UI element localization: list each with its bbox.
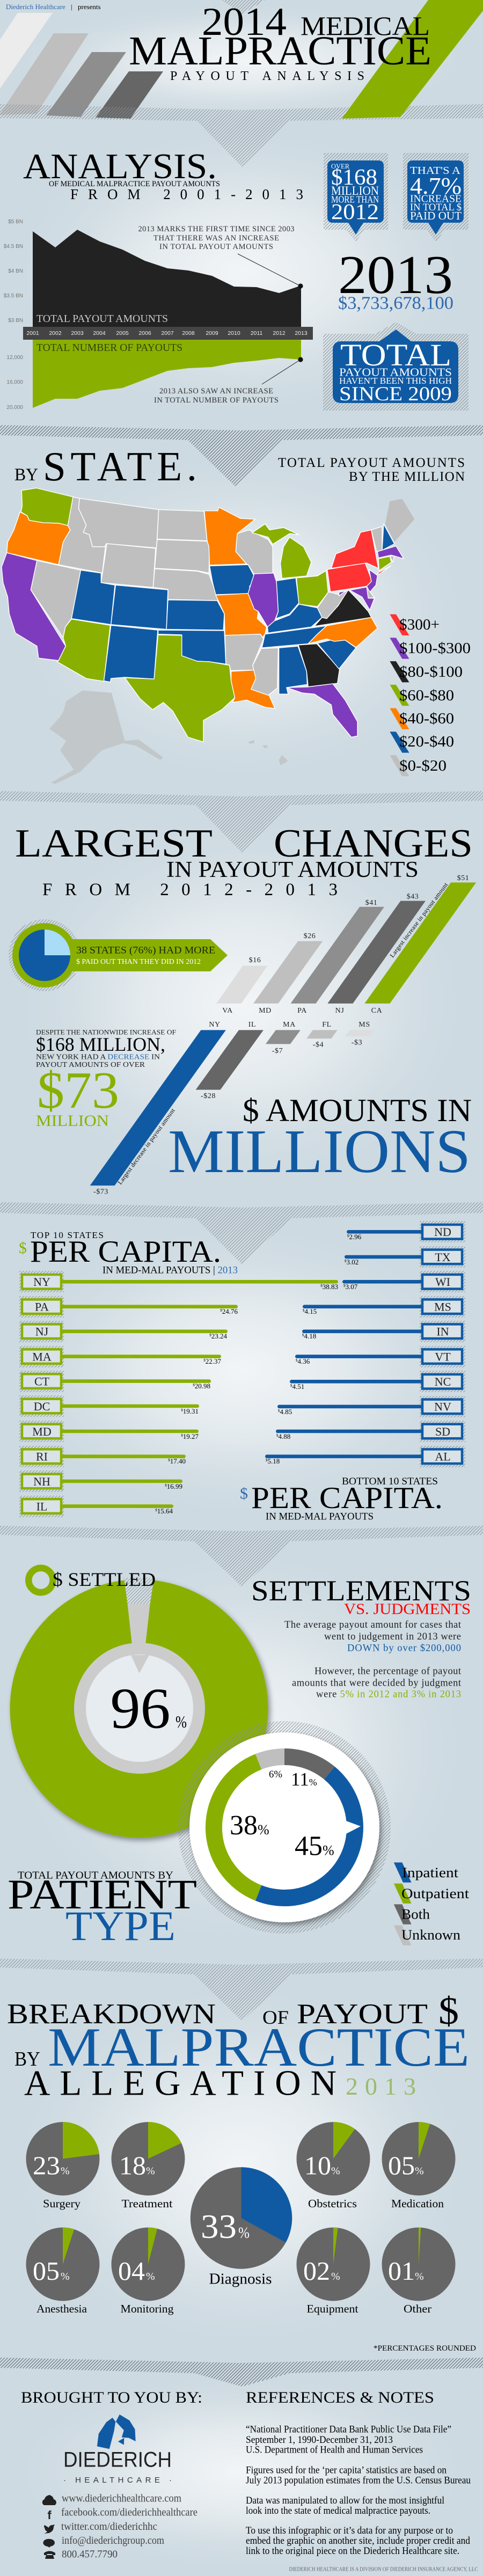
pie: monitoring: % xyxy=(146,2271,155,2282)
annotation: payout increase: 2013 MARKS THE FIRST TIME SINCE 2003 xyxy=(138,225,294,233)
callout: total since 2009: HAVEN'T BEEN THIS HIGH xyxy=(339,376,452,386)
chart: top 10 states per capita: NY xyxy=(33,1275,50,1289)
chart: top 10 states per capita: $ xyxy=(193,1383,195,1387)
chart: bottom 10 states per capita: 4.36 xyxy=(297,1357,310,1365)
chart: bottom 10 states per capita: NV xyxy=(434,1400,451,1414)
heading: amounts in millions: MILLIONS xyxy=(168,1117,471,1186)
pie: medication: Medication xyxy=(391,2197,444,2210)
heading: by state: BY xyxy=(14,465,38,485)
heading: breakdown by allegation: OF xyxy=(262,2007,289,2028)
chart: bottom 10 states per capita: 4.15 xyxy=(305,1307,317,1315)
donut chart: settled 96%: 96 xyxy=(111,1677,171,1741)
annotation: payout count increase: IN TOTAL NUMBER OF PAYOUTS xyxy=(154,396,279,405)
heading: top 10 per capita: IN MED-MAL PAYOUTS | 2013 xyxy=(103,1264,238,1276)
heading: analysis: FROM 2001-2013 xyxy=(70,186,303,202)
callout: 38 states pie: 38 STATES (76%) HAD MORE xyxy=(76,945,215,956)
chart: bottom 10 states per capita: 4.85 xyxy=(280,1408,292,1416)
heading: breakdown by allegation: PAYOUT xyxy=(297,1999,428,2030)
donut chart: settled 96% xyxy=(10,1578,268,1838)
subheading: by the million: TOTAL PAYOUT AMOUNTS xyxy=(278,456,465,470)
legend: settled xyxy=(28,1568,156,1592)
donut chart: patient type: 6% xyxy=(269,1769,282,1780)
text block: references: To use this infographic or it’s data for any purpose or to xyxy=(246,2525,453,2536)
donut chart: patient type: 45% xyxy=(295,1831,334,1861)
bar chart: largest increases: $51 xyxy=(457,874,469,882)
text block: judgment details xyxy=(284,1620,462,1700)
legend: patient type: Outpatient xyxy=(401,1886,470,1901)
chart: total payout amounts area chart xyxy=(4,219,313,411)
chart: total payout amounts area chart: 2002 xyxy=(49,330,62,336)
chart: total payout amounts area chart: 2001 xyxy=(26,330,39,336)
annotation: payout increase: THAT THERE WAS AN INCREASE xyxy=(153,234,279,243)
heading: largest changes xyxy=(15,822,473,899)
callout: 4.7% increase: PAID OUT xyxy=(410,209,462,222)
text block: references: link to the original piece on the Diederich Healthcare site. xyxy=(246,2545,459,2557)
heading: breakdown by allegation: ALLEGATION xyxy=(24,2063,336,2103)
heading: top 10 per capita xyxy=(19,1230,238,1276)
pie: medication: 05 xyxy=(388,2151,415,2180)
bar chart: largest decreases: NY xyxy=(209,1021,221,1029)
icon: telephone xyxy=(44,2551,55,2559)
chart: total payout amounts area chart: 2009 xyxy=(206,330,218,336)
text block: New York decrease: MILLION xyxy=(36,1112,109,1130)
chart: total payout amounts area chart: $4.5 BN xyxy=(4,244,23,250)
green header ribbon xyxy=(342,0,483,119)
chart: top 10 states per capita: 19.31 xyxy=(183,1407,199,1415)
bar chart: largest decreases xyxy=(90,1021,375,1196)
chart: top 10 states per capita: 38.83 xyxy=(323,1283,338,1291)
callout: $168 million: MILLION xyxy=(331,184,379,197)
heading: breakdown by allegation: $ xyxy=(438,1989,459,2032)
map legend: $0-$20 xyxy=(399,758,447,774)
chart: bottom 10 states per capita: $ xyxy=(303,1308,305,1313)
pie: treatment: Treatment xyxy=(121,2197,173,2210)
bar chart: largest decreases: MA xyxy=(283,1021,296,1029)
bar chart: largest decreases: -$73 xyxy=(93,1188,108,1196)
heading: bottom 10 per capita: PER CAPITA. xyxy=(251,1481,443,1515)
map legend xyxy=(390,614,471,776)
logo: Diederich Healthcare: · HEALTHCARE · xyxy=(63,2476,172,2485)
callout: $168 million: OVER xyxy=(331,163,350,170)
pie: diagnosis: % xyxy=(238,2224,250,2242)
map legend: $60-$80 xyxy=(399,687,454,704)
heading: patient type: TYPE xyxy=(65,1902,175,1949)
heading: analysis xyxy=(23,147,303,202)
chart: bottom 10 states per capita: $ xyxy=(276,1433,279,1438)
pie: monitoring: 04 xyxy=(118,2256,145,2286)
chart: total payout amounts area chart: 2013 xyxy=(295,330,308,336)
pie: other: 01 xyxy=(388,2256,415,2286)
chart: total payout amounts area chart: 20,000 xyxy=(6,405,23,411)
chart: bottom 10 states per capita: $ xyxy=(302,1333,304,1337)
stat: 2013 total: $3,733,678,100 xyxy=(338,293,453,313)
heading: breakdown by allegation xyxy=(7,1989,470,2103)
bar chart: largest decreases: Largest decrease in payout amount xyxy=(117,1107,177,1186)
pie: anesthesia: 05 xyxy=(33,2256,60,2286)
bar chart: largest decreases: -$3 xyxy=(352,1039,362,1046)
chart: top 10 states per capita: $ xyxy=(181,1433,183,1438)
bar chart: largest increases xyxy=(216,874,476,1015)
heading: analysis: ANALYSIS. xyxy=(23,147,217,186)
chart: top 10 states per capita: NH xyxy=(33,1475,50,1488)
heading: brought to you by: BROUGHT TO YOU BY: xyxy=(21,2389,202,2406)
annotation: payout count increase xyxy=(154,357,303,405)
chart: total payout amounts area chart: $3.5 BN xyxy=(4,293,23,299)
callout: total since 2009 xyxy=(323,322,469,411)
pie: anesthesia: Anesthesia xyxy=(36,2302,87,2315)
legend: patient type: Unknown xyxy=(401,1927,460,1943)
chart: top 10 states per capita: MA xyxy=(32,1350,52,1363)
text block: references: look into the state of medical malpractice payouts. xyxy=(246,2505,430,2516)
legend: patient type: Both xyxy=(401,1907,430,1922)
donut chart: settled 96%: % xyxy=(175,1712,187,1731)
bar chart: largest increases: PA xyxy=(297,1007,307,1015)
chart: total payout amounts area chart: 2006 xyxy=(138,330,151,336)
donut chart: patient type: 38% xyxy=(230,1810,269,1841)
pie: medication: % xyxy=(415,2165,424,2177)
chart: total payout amounts area chart: 2003 xyxy=(71,330,84,336)
heading: patient type: TOTAL PAYOUT AMOUNTS BY xyxy=(18,1870,173,1882)
legend: settled: $ SETTLED xyxy=(53,1569,156,1590)
donut chart: patient type xyxy=(178,1721,391,1934)
chart: total payout amounts area chart: 12,000 xyxy=(6,355,23,361)
chart: bottom 10 states per capita: $ xyxy=(266,1458,268,1462)
chart: bottom 10 states per capita: NC xyxy=(435,1375,451,1388)
pie: diagnosis: Diagnosis xyxy=(209,2271,272,2288)
chart: top 10 states per capita: 23.24 xyxy=(211,1332,228,1340)
pie: other xyxy=(382,2227,455,2315)
chart: total payout amounts area chart: TOTAL NUMBER OF PAYOUTS xyxy=(36,342,182,354)
chart: bottom 10 states per capita: 4.51 xyxy=(292,1382,304,1391)
icon: twitter bird xyxy=(44,2524,55,2534)
pie: surgery: 23 xyxy=(33,2151,60,2180)
chart: total payout amounts area chart: 16,000 xyxy=(6,379,23,385)
pie: diagnosis xyxy=(191,2167,292,2288)
pie: other: % xyxy=(415,2271,424,2282)
chart: bottom 10 states per capita: IN xyxy=(436,1324,449,1338)
text block: New York decrease xyxy=(36,1028,176,1130)
heading: references and notes: REFERENCES & NOTES xyxy=(246,2389,434,2406)
pie: treatment: % xyxy=(146,2165,155,2177)
chart: top 10 states per capita: $ xyxy=(155,1508,157,1512)
title: MEDICAL xyxy=(301,11,430,41)
chart: top 10 states per capita: CT xyxy=(34,1375,50,1388)
heading: settlements vs judgments: VS. JUDGMENTS xyxy=(344,1601,471,1618)
bar chart: largest increases: $16 xyxy=(249,956,261,964)
heading: bottom 10 per capita: $ xyxy=(240,1484,248,1503)
heading: patient type: PATIENT xyxy=(8,1871,197,1918)
icon: speech bubble xyxy=(43,2539,55,2548)
chart: top 10 states per capita: 22.37 xyxy=(206,1357,221,1365)
text block: New York decrease: $73 xyxy=(37,1062,119,1119)
legend: patient type xyxy=(394,1862,470,1945)
callout: $168 million: 2012 xyxy=(331,199,379,224)
annotation: payout increase xyxy=(138,225,303,289)
contact list: www.diederichhealthcare.com xyxy=(62,2493,181,2505)
pie: other: Other xyxy=(404,2302,431,2315)
header ribbons xyxy=(0,13,163,119)
chart: bottom 10 states per capita: AL xyxy=(435,1450,451,1463)
chart: total payout amounts area chart: $4 BN xyxy=(8,268,23,274)
map legend: $20-$40 xyxy=(399,734,454,750)
text block: New York decrease: PAYOUT AMOUNTS OF OVER xyxy=(36,1061,145,1069)
contact list xyxy=(42,2493,197,2560)
pie: monitoring xyxy=(112,2227,185,2315)
bar chart: largest decreases: -$4 xyxy=(313,1041,324,1049)
chart: bottom 10 states per capita: 3.02 xyxy=(347,1258,358,1266)
heading: largest changes: LARGEST xyxy=(15,822,213,866)
annotation: payout increase: IN TOTAL PAYOUT AMOUNTS xyxy=(159,243,273,251)
chart: top 10 states per capita: $ xyxy=(165,1483,167,1488)
chart: top 10 states per capita: RI xyxy=(36,1450,48,1463)
contact list: info@diederichgroup.com xyxy=(62,2535,164,2546)
heading: by state: STATE. xyxy=(43,443,197,489)
chart: bottom 10 states per capita: VT xyxy=(435,1350,451,1363)
bar chart: largest decreases: FL xyxy=(322,1021,332,1029)
header credit: presents xyxy=(78,3,101,11)
pie: equipment: Equipment xyxy=(307,2302,358,2315)
title: 2014 xyxy=(202,0,287,44)
pie: medication xyxy=(382,2122,455,2210)
chart: bottom 10 states per capita: $ xyxy=(290,1384,292,1388)
heading: largest changes: FROM 2012-2013 xyxy=(42,880,338,899)
callout: $168 million: MORE THAN xyxy=(331,194,379,205)
bar chart: largest decreases: -$7 xyxy=(272,1047,283,1055)
chart: total payout amounts area chart: TOTAL PAYOUT AMOUNTS xyxy=(36,313,168,325)
text block: judgment details: amounts that were decided by judgment xyxy=(292,1678,462,1689)
heading: largest changes: CHANGES xyxy=(274,822,473,866)
chart: total payout amounts area chart: 2010 xyxy=(228,330,240,336)
chart: total payout amounts area chart: 2008 xyxy=(182,330,195,336)
pie: anesthesia xyxy=(26,2227,100,2315)
chart: total payout amounts area chart: $3 BN xyxy=(8,318,23,324)
chart: top 10 states per capita: 15.64 xyxy=(157,1507,173,1515)
icon: web cloud xyxy=(42,2495,56,2505)
chart: total payout amounts area chart: 2005 xyxy=(116,330,129,336)
header credit: | xyxy=(71,3,72,11)
callout: total since 2009: TOTAL xyxy=(340,338,451,372)
pie: surgery: % xyxy=(61,2165,70,2177)
text block: judgment details: The average payout amount for cases that xyxy=(284,1620,462,1630)
chart: bottom 10 states per capita: SD xyxy=(435,1425,450,1438)
chart: top 10 states per capita: MD xyxy=(32,1425,52,1438)
callout: 4.7% increase: INCREASE xyxy=(410,193,462,205)
callout: 4.7% increase: IN TOTAL $ xyxy=(410,202,462,213)
text block: references xyxy=(246,2424,471,2557)
chart: top 10 states per capita: 19.27 xyxy=(183,1432,199,1440)
chart: total payout amounts area chart: $5 BN xyxy=(8,219,23,225)
pie: obstetrics: % xyxy=(331,2165,340,2177)
heading: bottom 10 per capita: BOTTOM 10 STATES xyxy=(342,1476,438,1487)
heading: breakdown by allegation: MALPRACTICE xyxy=(48,2017,470,2078)
chart: bottom 10 states per capita: ND xyxy=(434,1225,451,1239)
map legend: $80-$100 xyxy=(399,664,463,680)
heading: breakdown by allegation: BY xyxy=(14,2048,40,2070)
chart: top 10 states per capita: $ xyxy=(320,1284,323,1288)
chart: bottom 10 states per capita: $ xyxy=(278,1409,280,1413)
bar chart: largest decreases: MS xyxy=(358,1021,370,1029)
pie: monitoring: Monitoring xyxy=(120,2302,174,2315)
pie: surgery: Surgery xyxy=(43,2197,81,2210)
chart: top 10 states per capita: $ xyxy=(203,1358,206,1363)
chart: bottom 10 states per capita: $ xyxy=(343,1284,346,1288)
heading: settlements vs judgments: SETTLEMENTS xyxy=(251,1575,471,1607)
map legend: $100-$300 xyxy=(399,640,471,657)
text block: judgment details: went to judgement in 2013 were xyxy=(324,1631,461,1642)
callout: 38 states pie xyxy=(9,919,228,991)
heading: bottom 10 per capita: IN MED-MAL PAYOUTS xyxy=(266,1511,374,1522)
chart: bottom 10 states per capita: $ xyxy=(296,1358,298,1363)
heading: bottom 10 per capita xyxy=(240,1476,443,1522)
callout: 4.7% increase xyxy=(403,153,469,241)
chart: total payout amounts area chart: 2012 xyxy=(273,330,286,336)
callout: 4.7% increase: THAT'S A xyxy=(410,165,461,177)
heading: top 10 per capita: TOP 10 STATES xyxy=(31,1230,104,1240)
header credit: Diederich Healthcare xyxy=(6,3,65,11)
bar chart: largest increases: MD xyxy=(259,1007,272,1015)
bar chart: largest decreases: IL xyxy=(248,1021,256,1029)
contact list: twitter.com/diederichhc xyxy=(61,2521,157,2533)
chart: top 10 states per capita: IL xyxy=(36,1499,47,1513)
chart: bottom 10 states per capita: 4.18 xyxy=(304,1332,316,1340)
chart: total payout amounts area chart: 2004 xyxy=(93,330,106,336)
chart: bottom 10 states per capita: 5.18 xyxy=(267,1457,280,1465)
pie: diagnosis: 33 xyxy=(201,2207,237,2245)
callout: total since 2009: SINCE 2009 xyxy=(339,383,452,405)
text block: references: “National Practitioner Data Bank Public Use Data File” xyxy=(246,2424,451,2435)
bar chart: largest increases: $43 xyxy=(407,893,419,901)
bar chart: largest increases: CA xyxy=(371,1007,383,1015)
bar chart: largest increases: Largest increase in payout amount xyxy=(389,881,450,959)
callout: 38 states pie: $ PAID OUT THAN THEY DID IN 2012 xyxy=(76,957,201,965)
heading: breakdown by allegation: BREAKDOWN xyxy=(7,1999,216,2030)
icon: facebook: f xyxy=(47,2508,52,2522)
callout: 4.7% increase: 4.7% xyxy=(410,173,462,199)
chart: bottom 10 states per capita: $ xyxy=(347,1234,349,1238)
callout: $168 million xyxy=(324,153,388,241)
chart: total payout amounts area chart: 2007 xyxy=(161,330,174,336)
map: US states by payout xyxy=(2,488,414,784)
heading: largest changes: IN PAYOUT AMOUNTS xyxy=(166,858,419,882)
legend: patient type: Inpatient xyxy=(402,1865,459,1880)
subheading: by the million: BY THE MILLION xyxy=(349,470,465,484)
chart: top 10 states per capita: PA xyxy=(35,1300,49,1314)
title: PAYOUT ANALYSIS xyxy=(170,69,364,83)
bar chart: largest increases: VA xyxy=(222,1007,233,1015)
contact list: 800.457.7790 xyxy=(62,2549,118,2560)
text block: references: September 1, 1990-December 31, 2013 xyxy=(246,2434,393,2446)
chart: top 10 states per capita xyxy=(19,1271,338,1517)
title xyxy=(129,0,431,83)
text block: judgment details: However, the percentage of payout xyxy=(314,1666,462,1677)
logo: Diederich Healthcare: DIEDERICH xyxy=(63,2448,172,2472)
heading: analysis: OF MEDICAL MALPRACTICE PAYOUT AMOUNTS xyxy=(49,180,220,188)
contact list: facebook.com/diederichhealthcare xyxy=(61,2506,197,2518)
chart: bottom 10 states per capita: TX xyxy=(435,1250,451,1264)
pie: treatment: 18 xyxy=(119,2151,146,2180)
pie: surgery xyxy=(26,2122,100,2210)
text block: New York decrease: DESPITE THE NATIONWIDE INCREASE OF xyxy=(36,1028,176,1036)
text block: references: U.S. Department of Health and Human Services xyxy=(246,2445,423,2456)
pie: anesthesia: % xyxy=(61,2271,70,2282)
chart: total payout amounts area chart: 2011 xyxy=(251,330,262,336)
chart: top 10 states per capita: $ xyxy=(209,1333,211,1337)
chart: bottom 10 states per capita: MS xyxy=(434,1300,451,1314)
chart: top 10 states per capita: NJ xyxy=(35,1324,49,1338)
chart: bottom 10 states per capita: 3.07 xyxy=(346,1283,358,1291)
heading: settlements vs judgments xyxy=(251,1575,471,1618)
text block: New York decrease: $168 MILLION, xyxy=(36,1034,165,1055)
title: MALPRACTICE xyxy=(129,28,431,74)
heading: patient type xyxy=(8,1870,197,1949)
chart: top 10 states per capita: $ xyxy=(181,1408,183,1413)
chart: bottom 10 states per capita: 4.88 xyxy=(278,1432,290,1440)
chart: top 10 states per capita: 20.98 xyxy=(195,1382,210,1390)
chart: top 10 states per capita: 16.99 xyxy=(167,1482,182,1490)
bar chart: largest decreases: -$28 xyxy=(201,1092,216,1100)
chart: top 10 states per capita: DC xyxy=(34,1400,50,1413)
chart: top 10 states per capita: 17.40 xyxy=(170,1457,186,1465)
chart: top 10 states per capita: 24.76 xyxy=(222,1307,238,1315)
chart: bottom 10 states per capita: WI xyxy=(435,1275,450,1289)
pie: treatment xyxy=(112,2122,185,2210)
chart: bottom 10 states per capita xyxy=(265,1221,465,1467)
stat: 2013 total: 2013 xyxy=(338,245,453,305)
chart: top 10 states per capita: $ xyxy=(168,1458,170,1462)
map legend: $40-$60 xyxy=(399,711,454,727)
text block: references: Figures used for the ‘per capita’ statistics are based on xyxy=(246,2464,447,2476)
heading: breakdown by allegation: 2013 xyxy=(346,2073,416,2100)
text block: New York decrease: NEW YORK HAD A DECREASE IN xyxy=(36,1053,160,1062)
bar chart: largest increases: $41 xyxy=(365,899,377,907)
heading: top 10 per capita: PER CAPITA. xyxy=(30,1235,221,1269)
heading: amounts in millions: $ AMOUNTS IN xyxy=(243,1093,472,1128)
pie: obstetrics xyxy=(296,2122,370,2210)
text block: judgment details: DOWN by over $200,000 xyxy=(347,1643,461,1654)
heading: top 10 per capita: $ xyxy=(19,1239,27,1257)
chart: bottom 10 states per capita: 2.96 xyxy=(349,1233,362,1241)
pie: obstetrics: Obstetrics xyxy=(308,2197,357,2210)
subheading: by the million xyxy=(278,456,465,484)
map legend: $300+ xyxy=(399,617,440,633)
text block: references: Data was manipulated to allow for the most insightful xyxy=(246,2495,444,2506)
bar chart: largest increases: $26 xyxy=(304,932,316,940)
callout: total since 2009: PAYOUT AMOUNTS xyxy=(339,366,452,379)
footnote: percentages rounded: *PERCENTAGES ROUNDED xyxy=(374,2344,476,2353)
bar chart: largest increases: NJ xyxy=(335,1007,344,1015)
donut chart: patient type: 11% xyxy=(291,1769,317,1790)
pie: obstetrics: 10 xyxy=(304,2151,331,2180)
pie: equipment: % xyxy=(331,2271,340,2282)
annotation: payout count increase: 2013 ALSO SAW AN INCREASE xyxy=(159,387,273,396)
pie: equipment xyxy=(296,2227,370,2315)
logo: Diederich Healthcare xyxy=(63,2414,172,2485)
pie: equipment: 02 xyxy=(303,2256,330,2286)
chart: bottom 10 states per capita: $ xyxy=(345,1259,347,1263)
chart: top 10 states per capita: $ xyxy=(220,1308,222,1313)
callout: $168 million: $168 xyxy=(331,165,377,190)
text block: judgment details: were 5% in 2012 and 3% in 2013 xyxy=(316,1689,461,1700)
